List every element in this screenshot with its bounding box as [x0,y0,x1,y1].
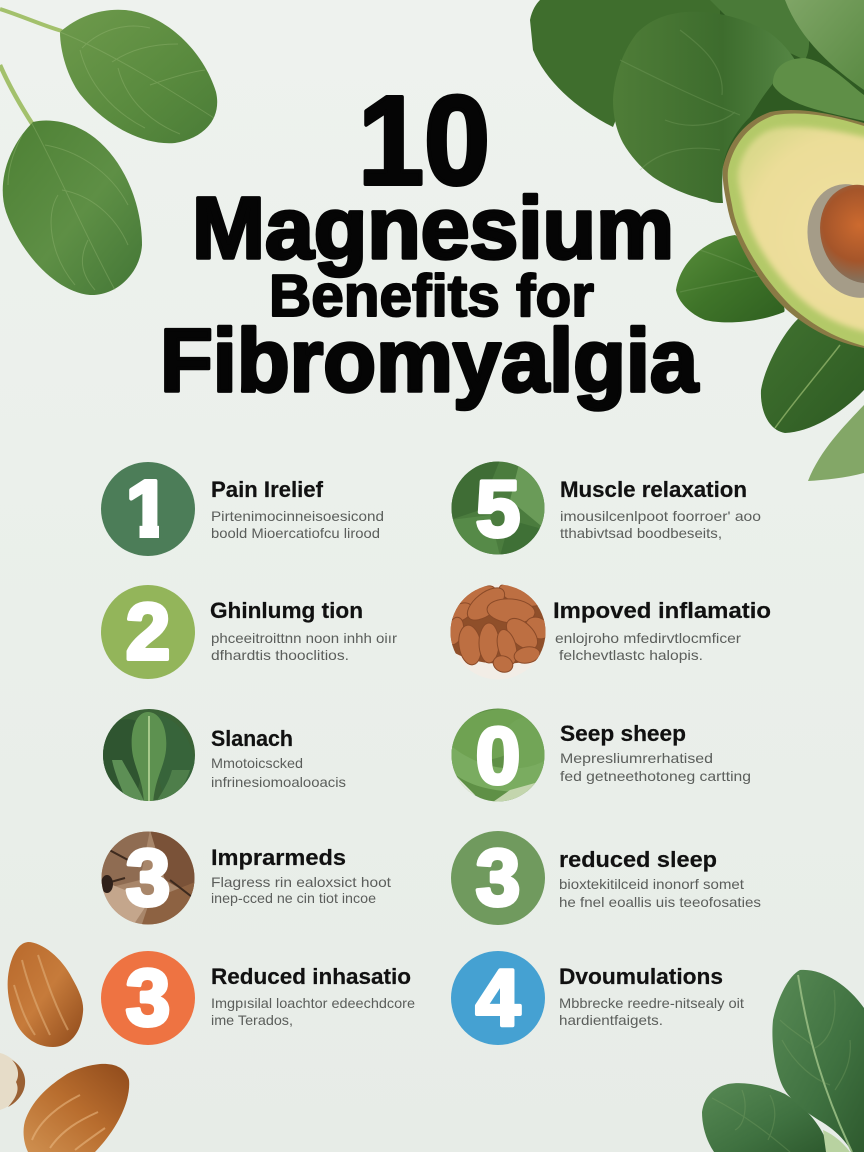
heading: Impoved inflamatio [553,598,771,623]
description [211,508,384,541]
photo: spinach leaves bottom right [702,970,864,1152]
title [160,70,699,410]
leaf: top dark [710,0,809,60]
leaf: backing shadow [640,0,864,170]
description: inep-cced ne cin tiot incoe [211,890,376,906]
avocado pit [793,172,864,310]
leaf: small left [702,1083,826,1152]
heading: Ghinlumg tion [210,598,363,623]
badge 0: leaf photo [452,708,544,802]
badge 4 blue [451,951,545,1045]
badge 1: 1 [126,464,170,553]
badge 3: wood photo: 3 [126,833,170,922]
almond lower [24,1064,129,1152]
description: Mmotoicscked [211,755,303,771]
heading: reduced sleep [559,847,717,872]
heading: Seep sheep [560,721,686,746]
description [559,995,744,1028]
avocado half [723,110,864,348]
badge: almonds photo [450,584,546,680]
badge 1 [101,462,195,556]
leaf: right overlapped [773,58,864,121]
description [560,508,761,541]
description: Mepresliumrerhatised [560,750,713,766]
item 3: Slanach [100,706,346,804]
item 2: Ghinlumg tion [101,585,397,679]
heading: Slanach [211,726,293,751]
badge 3 green: 3 [476,833,520,922]
heading: Imprarmeds [211,845,346,870]
badge 4 blue: 4 [476,953,521,1042]
heading: Pain Irelief [211,477,324,502]
item 4: Imprarmeds [100,830,391,930]
description: Pirtenimocinneisoesicond [211,508,384,524]
badge 5: spinach texture [450,460,546,556]
item 7: Impoved inflamatio [444,579,771,680]
badge 3 orange [101,951,195,1045]
photo: spinach and avocado top right [530,0,864,481]
almond upper [8,942,83,1047]
item 9: reduced sleep [451,831,761,925]
title: Fibromyalgia: Fibromyalgia [160,310,699,410]
badge 5: spinach texture: 5 [476,464,520,553]
item 5: Reduced inhasatio [101,951,415,1045]
title: Magnesium: Magnesium [192,180,674,277]
stem [823,1130,850,1152]
item 10: Dvoumulations [451,951,744,1045]
description [211,995,415,1028]
photo: spinach leaves top left [0,9,217,295]
badge 0: leaf photo: 0 [476,711,520,800]
heading: Dvoumulations [559,964,723,989]
description [555,630,741,663]
badge 2 [101,585,195,679]
description: Flagress rin ealoxsict hoot [211,874,391,890]
description: fed getneethotoneg cartting [560,768,751,784]
description: hardientfaigets. [559,1012,663,1028]
leaf: far right light [808,405,864,481]
leaf: large right [772,970,864,1152]
description [211,755,346,790]
description: dfhardtis thooclitios. [211,647,349,663]
badge: spinach photo [103,709,195,801]
item 8: Seep sheep [452,708,750,802]
leaf: lower right dark [761,317,864,433]
heading: Reduced inhasatio [211,964,411,989]
description: ime Terados, [211,1012,293,1028]
leaf: under avocado [676,235,785,322]
badge 2: 2 [126,587,170,676]
description: imousilcenlpoot foorroer' aoo [560,508,761,524]
description [560,750,751,784]
description: Imgpısilal loachtor edeechdcore [211,995,415,1011]
leaf: back dark [530,0,720,127]
leaf: upper right light [785,0,864,90]
description: tthabivtsad boodbeseits, [560,525,722,541]
description: he fnel eoallis uis teeofosaties [559,894,761,910]
description [211,630,397,663]
leaf: large centre [613,12,795,203]
photo: almonds bottom left [0,942,129,1152]
almond half [0,1053,25,1110]
item 1: Pain Irelief [101,462,384,556]
badge 3: wood photo [102,832,194,924]
title: Benefits for: Benefits for [269,263,594,329]
description: Mbbrecke reedre-nitsealy oit [559,995,744,1011]
description: phceeitroittnn noon inhh oiır [211,630,397,646]
description: bioxtekitilceid inonorf somet [559,876,744,892]
description: enlojroho mfedirvtlocmficer [555,630,741,646]
description [211,874,391,906]
badge 3 orange: 3 [126,953,170,1042]
heading: Muscle relaxation [560,477,747,502]
item 6: Muscle relaxation [450,460,761,556]
description: infrinesiomoalooacis [211,774,346,790]
badge 3 green [451,831,545,925]
title: number 10: 10 [358,70,490,211]
description: felchevtlastc halopis. [559,647,703,663]
description: boold Mioercatiofcu lirood [211,525,380,541]
description [559,876,761,910]
